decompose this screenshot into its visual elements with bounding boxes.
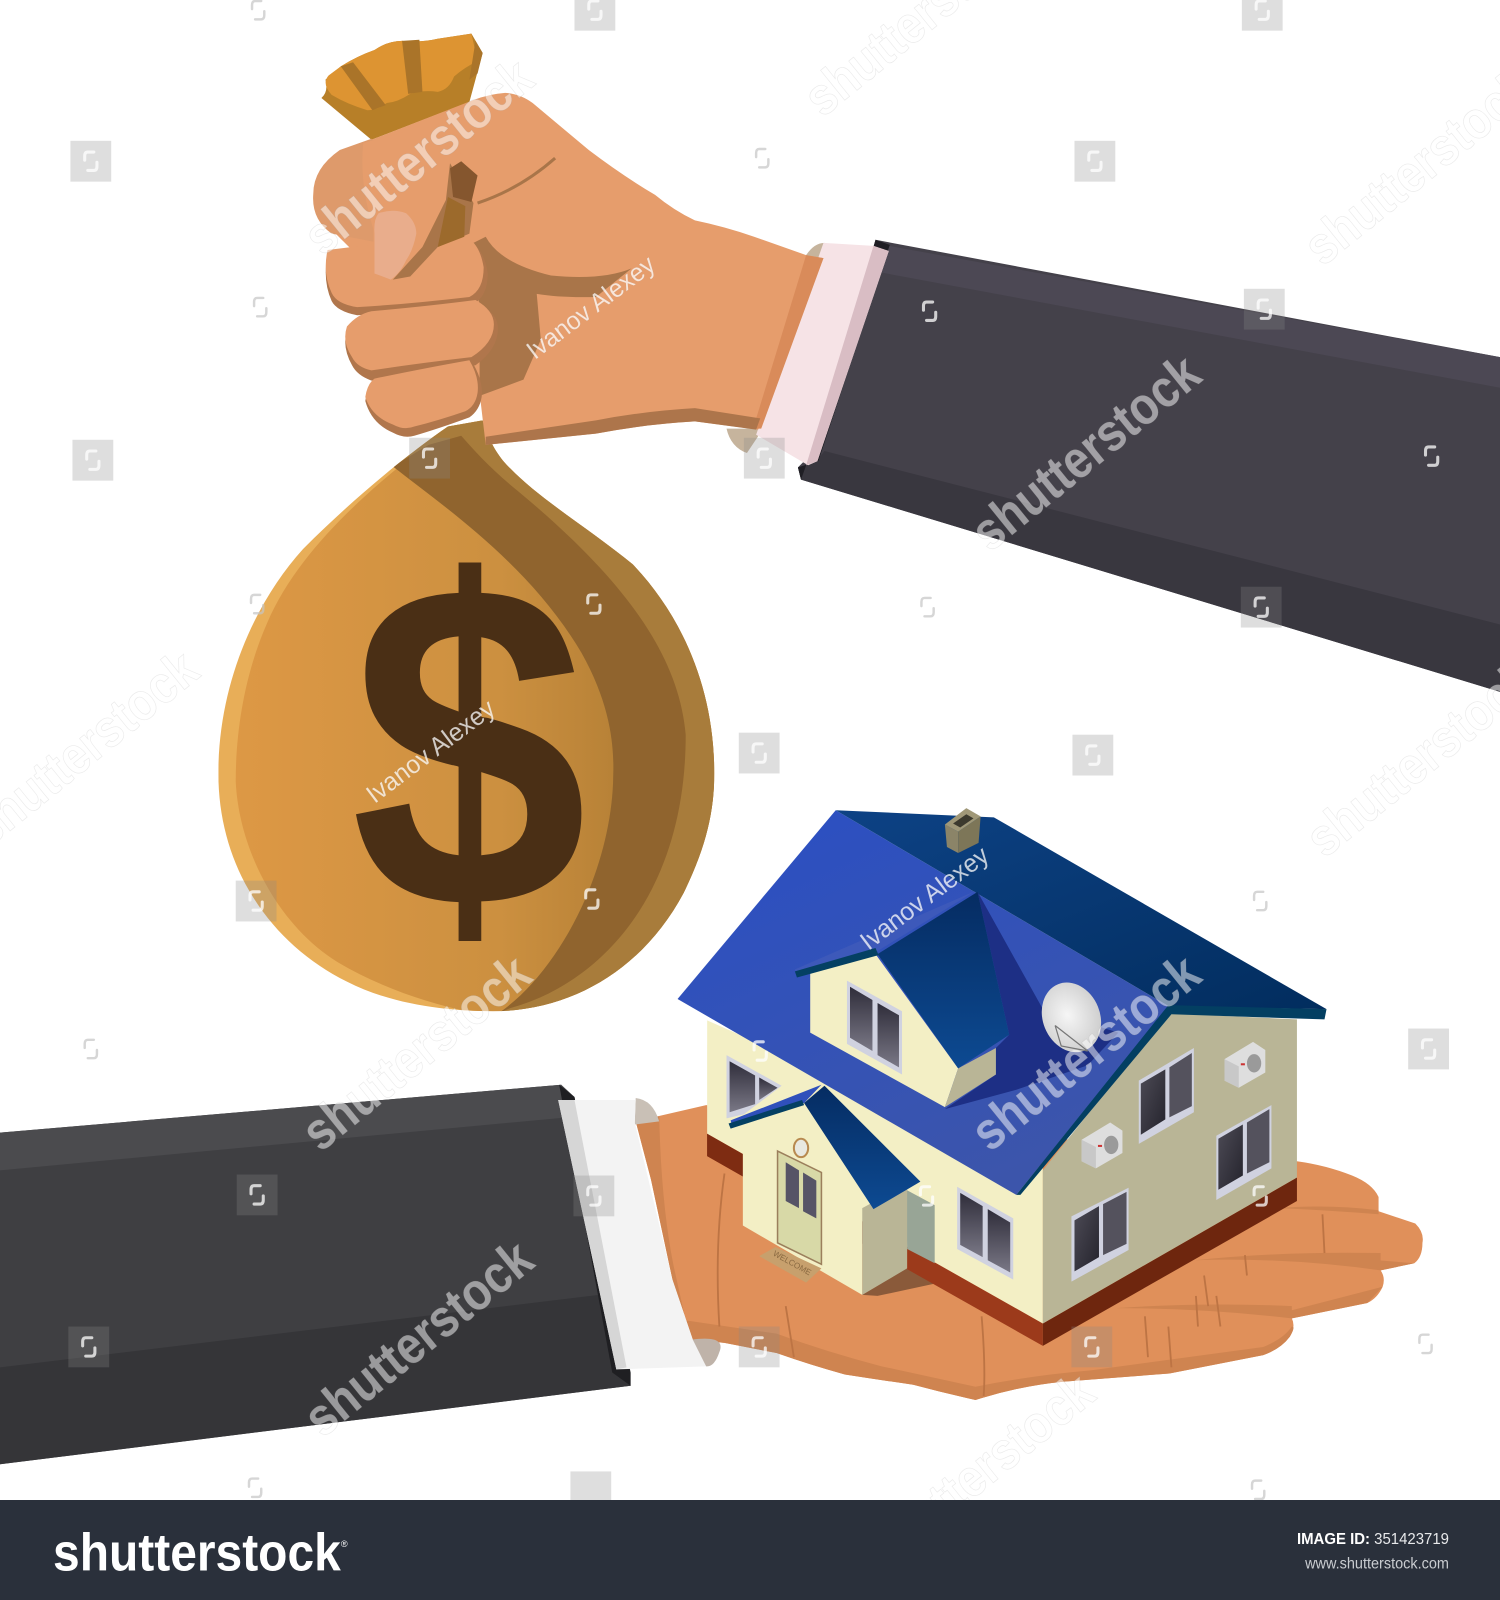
right wall [1043,1013,1297,1323]
watermark: shutterstock text: shutterstock [291,943,542,1162]
lower hand cuff: white shirt [558,1098,721,1369]
thumb base [313,139,388,243]
watermark: author name: Ivanov Alexey [855,841,994,956]
porch roof [731,1085,821,1128]
satellite dish [1032,974,1111,1061]
money bag body [204,408,735,1020]
finger shading [1116,1207,1414,1318]
welcome mat [759,1247,821,1283]
hand back [337,93,823,445]
dormer roof [795,891,976,977]
side wall shadow [906,1190,935,1263]
upper arm: dark suit sleeve [798,240,1500,692]
footer bar [0,1500,1500,1600]
watermark: shutterstock text: shutterstock [960,943,1212,1162]
lower hand: open palm [636,1105,1423,1400]
crease [478,158,555,203]
foundation [707,1134,1043,1346]
front lower window [957,1187,1013,1280]
palm left shading [636,1116,1293,1400]
thumb [362,120,464,280]
dormer walls [810,954,958,1107]
upper left window [727,1055,782,1118]
bag neck in fist [438,197,465,247]
watermark: shutterstock text: shutterstock [960,343,1212,562]
watermark: shutterstock text: shutterstock [293,1229,544,1448]
footer logo: shutterstock [53,1523,341,1582]
right wall windows [1071,1048,1271,1282]
thumb nail [374,211,416,280]
finger 1 [326,241,488,315]
air conditioners [1082,1042,1265,1168]
front wall [707,1020,1043,1323]
roof eaves [1016,1005,1327,1195]
dollar sign on bag: $ [350,488,587,1006]
watermark: shutterstock text: shutterstock [293,47,544,266]
roof light plane [678,810,1168,1195]
upper hand: fist holding bag [313,93,823,445]
thumb shadow [393,163,473,280]
porch walls [743,1105,862,1295]
house [678,808,1327,1346]
watermark: shutterstock text: shutterstock [854,1361,1106,1581]
welcome mat: WELCOME [771,1249,813,1278]
registered mark: ® [341,1539,348,1549]
image id: IMAGE ID: 351423719 [1297,1531,1449,1548]
porch lamp [794,1139,808,1157]
watermark: author name [361,250,994,956]
upper hand cuff: pink shirt [727,243,889,465]
bag top tuft [321,34,483,140]
roof dark plane [836,810,1327,1009]
door [778,1151,821,1264]
dormer window [847,981,902,1074]
palm shadow [469,237,632,396]
finger 2 [345,304,498,381]
dormer shadow on roof [945,892,1118,1109]
website: www.shutterstock.com [1304,1555,1449,1572]
watermark: author name: Ivanov Alexey [361,694,501,809]
shadow on palm [862,1268,935,1296]
lower arm: dark suit sleeve [0,1085,631,1464]
watermark: author name: Ivanov Alexey [521,250,661,365]
finger 3 [365,364,482,437]
chimney [945,808,981,853]
